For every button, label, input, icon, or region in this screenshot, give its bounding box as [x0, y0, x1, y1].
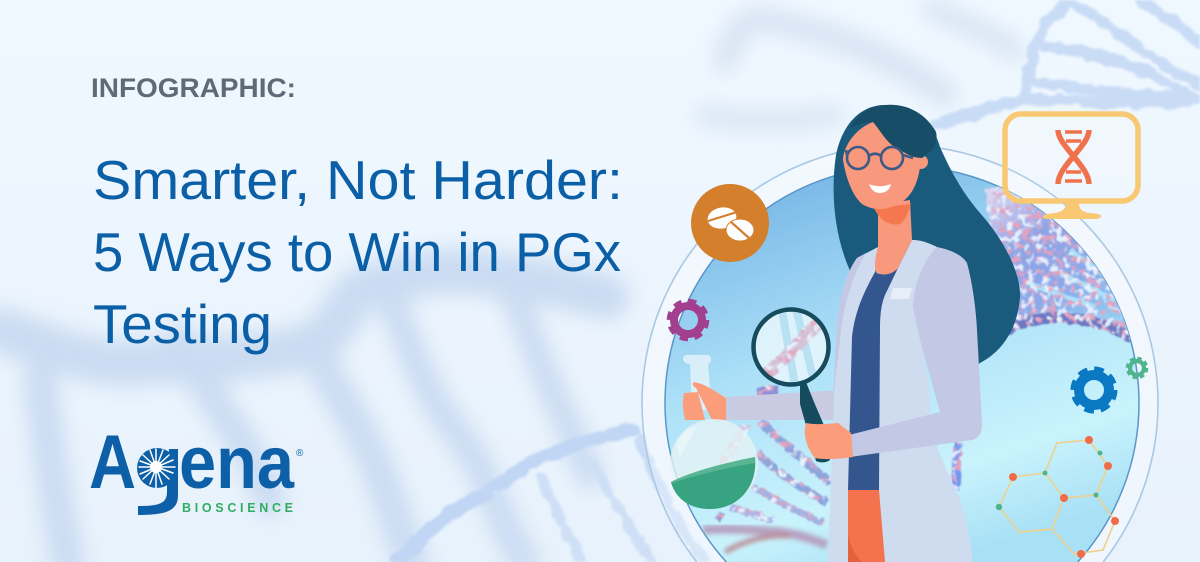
logo: Agena Bioscience: ena: [179, 421, 295, 504]
title: Smarter, Not Harder:: [93, 149, 623, 211]
logo star: [139, 449, 175, 488]
monitor stand: [1043, 203, 1101, 219]
coat sleeve: [849, 247, 982, 457]
raised arm: [726, 390, 840, 420]
disc with DNA photo: [665, 165, 1150, 562]
gear: purple: [670, 302, 706, 338]
lens: [754, 310, 828, 384]
dna in disc: upper right: [984, 186, 1130, 344]
flask liquid: [671, 457, 755, 509]
coat left edge: [833, 253, 866, 400]
logo: Agena Bioscience: A: [89, 420, 136, 505]
heading label: INFOGRAPHIC:: [91, 73, 296, 103]
molecule diagram: [996, 436, 1119, 558]
monitor icon: [1005, 114, 1138, 219]
gear: blue: [1074, 370, 1114, 410]
logo: Agena Bioscience: [89, 420, 304, 515]
glasses: [846, 147, 913, 169]
scientist: [726, 105, 1020, 562]
icon: pills: [706, 205, 754, 242]
title: Testing: [93, 293, 272, 355]
handle: [800, 382, 830, 462]
magnifying glass: [754, 305, 830, 462]
neck shadow: [874, 204, 911, 224]
smile: [869, 184, 891, 193]
gear: green: [1127, 358, 1147, 378]
trousers: [848, 490, 885, 562]
pill badge: [691, 184, 769, 262]
face: [843, 122, 921, 209]
dna in disc: lower left: [717, 390, 958, 523]
logo: Agena Bioscience: BIOSCIENCE: [182, 501, 293, 515]
icon: dna: [1058, 130, 1089, 184]
hand holding magnifier: [805, 423, 853, 459]
shirt: [848, 268, 898, 490]
title: 5 Ways to Win in PGx: [93, 221, 621, 283]
coat: [828, 240, 973, 562]
hand holding flask: [683, 382, 726, 420]
flask: [670, 419, 758, 509]
neck: [875, 200, 912, 275]
fringe: [850, 105, 937, 158]
logo: Agena Bioscience: ®: [296, 448, 304, 459]
outer ring: [642, 145, 1158, 562]
flask neck: [683, 355, 712, 410]
title: [93, 149, 623, 355]
hair back: [834, 105, 1020, 380]
pocket: [890, 288, 912, 299]
